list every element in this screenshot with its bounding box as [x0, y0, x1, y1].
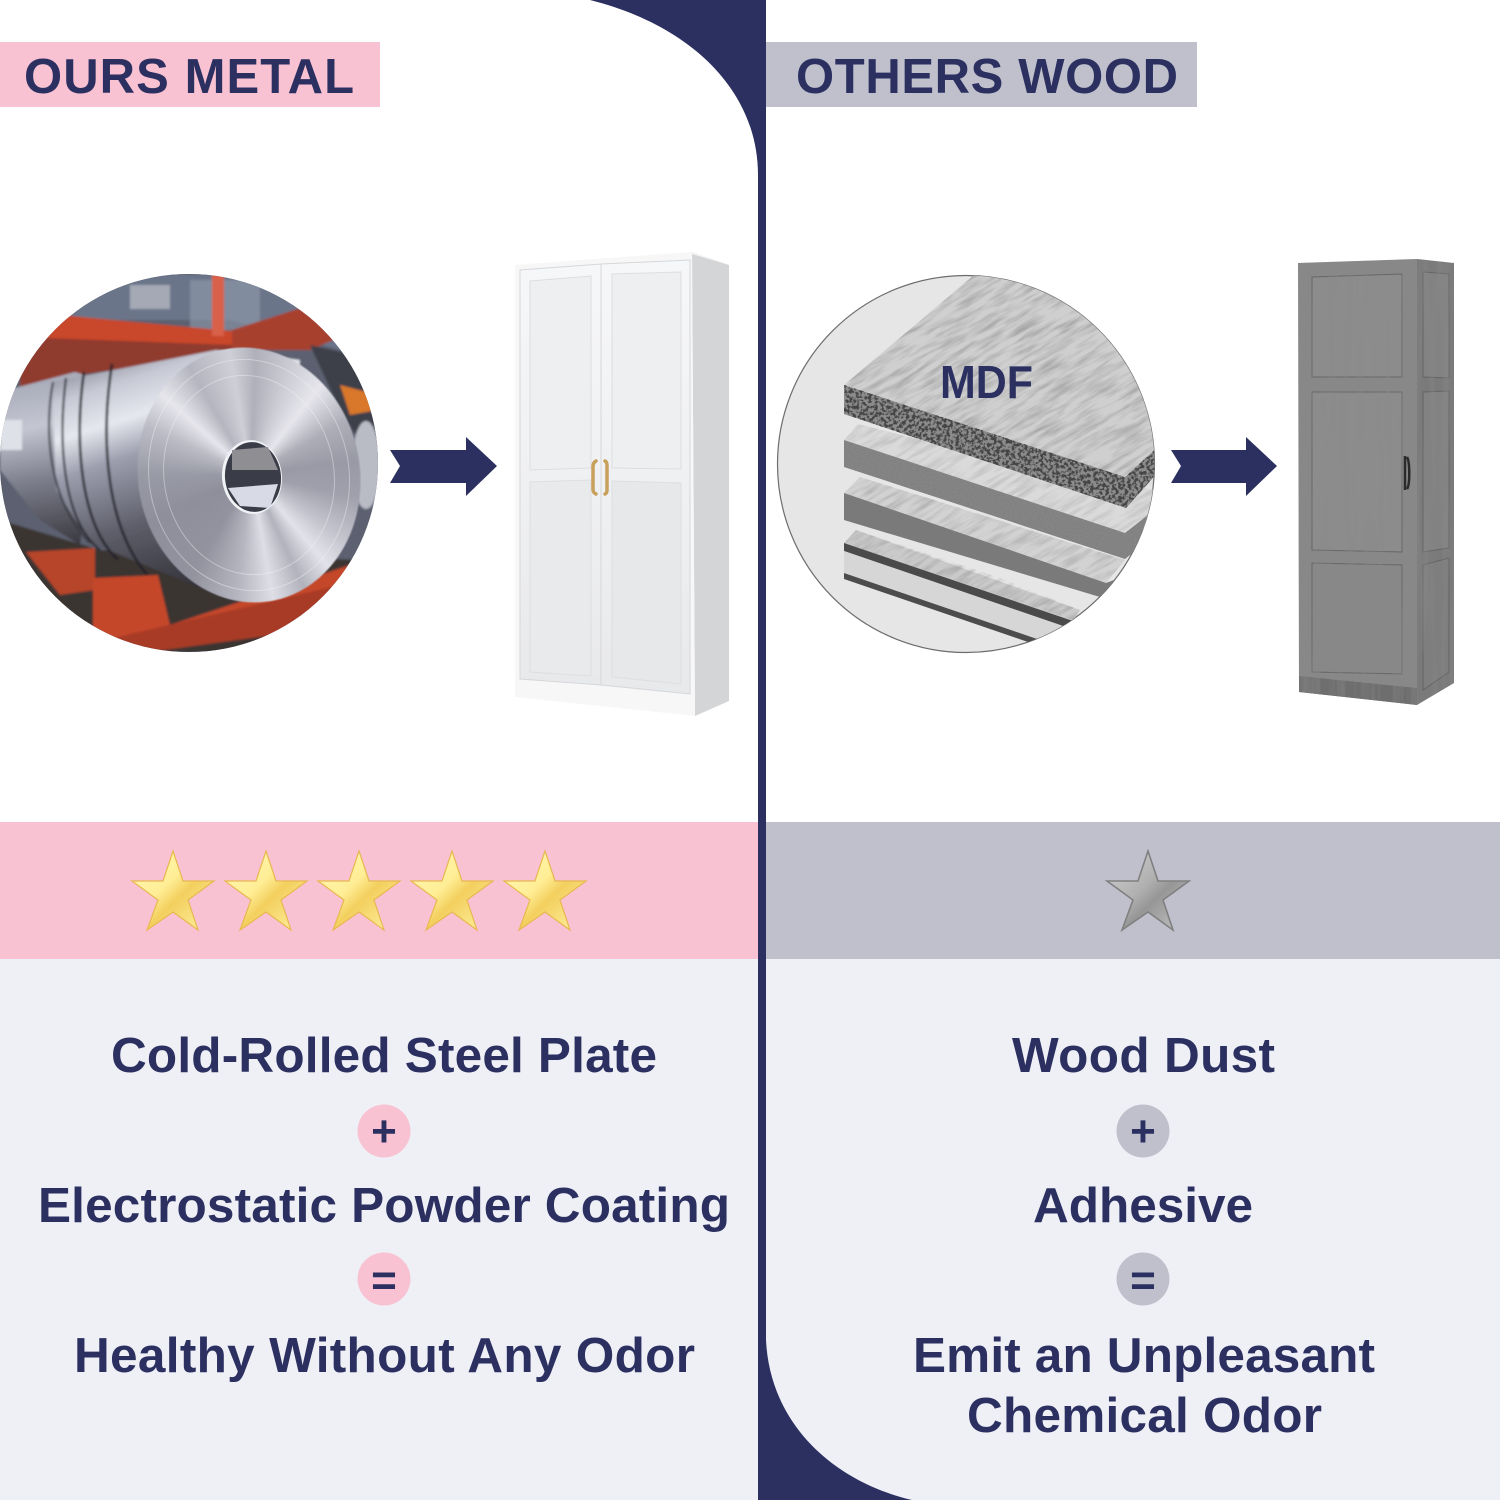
- layer 4: [844, 530, 1080, 621]
- heading: others wood: OTHERS WOOD: [796, 50, 1178, 104]
- text block: wood material formula: Adhesive: [1033, 1178, 1253, 1233]
- steel coil photo circle: [0, 274, 378, 652]
- panel: metal material background: [0, 959, 758, 1500]
- arrow: wood to cabinet: [1171, 437, 1277, 496]
- right small coil: [352, 421, 380, 509]
- text block: wood material formula: Emit an Unpleasant: [913, 1328, 1375, 1383]
- arrow: metal to cabinet: [390, 437, 497, 496]
- panel: wood material background: [766, 959, 1500, 1500]
- text block: metal material formula: [38, 1028, 730, 1383]
- icon: gold door handles: [593, 461, 607, 494]
- red beams: [45, 315, 232, 349]
- icon: plus: +: [371, 1107, 397, 1156]
- factory backdrop: [0, 274, 378, 652]
- text block: metal material formula: Cold-Rolled Steel Plate: [111, 1028, 657, 1083]
- one silver star: [1107, 851, 1189, 930]
- text block: wood material formula: Wood Dust: [1012, 1028, 1275, 1083]
- panel: pink star rating band: [0, 822, 758, 959]
- icon: plus: +: [1130, 1107, 1156, 1156]
- panel: gray star rating band: [766, 822, 1500, 959]
- text block: metal material formula: Electrostatic Powder Coating: [38, 1178, 730, 1233]
- second coil: [0, 372, 100, 545]
- text block: metal material formula: Healthy Without Any Odor: [74, 1328, 695, 1383]
- icon: plus: [1116, 1104, 1170, 1158]
- heading: ours metal: OURS METAL: [24, 50, 354, 104]
- five gold stars: [132, 851, 586, 930]
- white metal cabinet: [515, 252, 729, 716]
- red pedestal and base beam: [93, 565, 352, 652]
- icon: plus: [358, 1104, 410, 1158]
- label: MDF: MDF: [940, 356, 1033, 408]
- icon: equals: [358, 1252, 410, 1306]
- gray wood cabinet: [1296, 255, 1456, 710]
- icon: equals: =: [371, 1256, 397, 1305]
- lower dark floor: [0, 520, 378, 652]
- icon: equals: [1116, 1252, 1170, 1306]
- layer 3: [844, 477, 1125, 583]
- MDF board layers circle: [776, 274, 1156, 654]
- coil body: [52, 350, 300, 603]
- text block: wood material formula: [913, 1028, 1375, 1443]
- icon: black door handle: [1405, 456, 1409, 490]
- coil face: [117, 330, 381, 620]
- center divider with curved corners: [590, 0, 912, 1500]
- coil center hole: [218, 437, 286, 517]
- layer 2: [844, 424, 1155, 533]
- layer 1 top board: [844, 270, 1160, 477]
- text block: wood material formula: Chemical Odor: [967, 1388, 1322, 1443]
- coil rings: [130, 343, 368, 607]
- icon: equals: =: [1130, 1256, 1156, 1305]
